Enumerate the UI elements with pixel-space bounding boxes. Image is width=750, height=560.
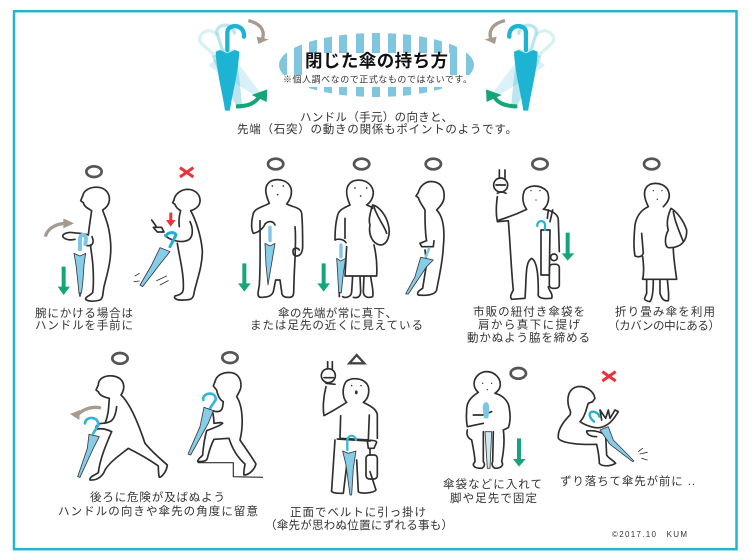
figure: arm hook, good bbox=[45, 166, 111, 301]
caption: walking: ハンドルの向きや傘先の角度に留意 bbox=[58, 504, 258, 518]
caption: arm hook bbox=[35, 307, 133, 332]
icon: umbrella right bbox=[482, 21, 564, 112]
caption: walking: 後ろに危険が及ばぬよう bbox=[90, 490, 225, 504]
caption: commuter: 市販の紐付き傘袋を bbox=[473, 304, 585, 318]
figure: phone user, bad bbox=[134, 168, 202, 300]
figure: belt hook, triangle bbox=[321, 355, 377, 495]
intro text: ハンドル（手元）の向きと、 bbox=[300, 110, 453, 124]
figure: commuter with bag strap bbox=[494, 159, 574, 299]
figure: seated umbrella slips, bad bbox=[558, 372, 647, 466]
caption: seated good: 傘袋などに入れて bbox=[443, 477, 542, 491]
caption: folding umbrella: （カバンの中にある） bbox=[608, 320, 720, 332]
caption: folding umbrella bbox=[608, 304, 720, 332]
intro text bbox=[237, 110, 517, 136]
subtitle: ※個人調べなので正式なものではないです。 bbox=[283, 74, 472, 84]
striped ellipse bbox=[279, 33, 474, 97]
caption: seated good: 脚や足先で固定 bbox=[450, 491, 538, 505]
caption: belt hook bbox=[265, 505, 453, 532]
icon: umbrella left bbox=[189, 21, 271, 112]
figure: stairs bbox=[188, 352, 263, 477]
caption: commuter bbox=[467, 304, 590, 344]
caption: slipping: ずり落ちて傘先が前に .. bbox=[560, 474, 695, 488]
caption: belt hook: 正面でベルトに引っ掛け bbox=[290, 505, 426, 519]
figure: side standing bbox=[406, 159, 444, 295]
caption: tip points down bbox=[250, 306, 423, 332]
figure: folding umbrella in bag bbox=[634, 159, 687, 302]
intro text: 先端（石突）の動きの関係もポイントのようです。 bbox=[237, 122, 517, 136]
title block bbox=[279, 33, 474, 97]
caption: belt hook: （傘先が思わぬ位置にずれる事も） bbox=[265, 518, 453, 532]
caption: arm hook: ハンドルを手前に bbox=[35, 318, 133, 332]
heading: 閉じた傘の持ち方 bbox=[305, 51, 448, 71]
caption: seated good bbox=[443, 477, 542, 505]
figure: walking bbox=[70, 353, 167, 480]
caption: arm hook: 腕にかける場合は bbox=[35, 307, 133, 320]
caption: commuter: 動かぬよう脇を締める bbox=[467, 330, 590, 344]
caption: folding umbrella: 折り畳み傘を利用 bbox=[615, 304, 715, 318]
figure: front, man bbox=[238, 159, 303, 297]
copyright: ©2017.10 KUM bbox=[612, 530, 687, 539]
caption: tip points down: または足先の近くに見えている bbox=[250, 318, 423, 332]
caption: tip points down: 傘の先端が常に真下、 bbox=[278, 306, 397, 320]
caption: walking bbox=[58, 490, 258, 518]
figure: seated with umbrella between legs bbox=[466, 368, 526, 468]
figure: front, woman bbox=[317, 159, 389, 298]
caption: commuter: 肩から真下に提げ bbox=[478, 318, 580, 332]
